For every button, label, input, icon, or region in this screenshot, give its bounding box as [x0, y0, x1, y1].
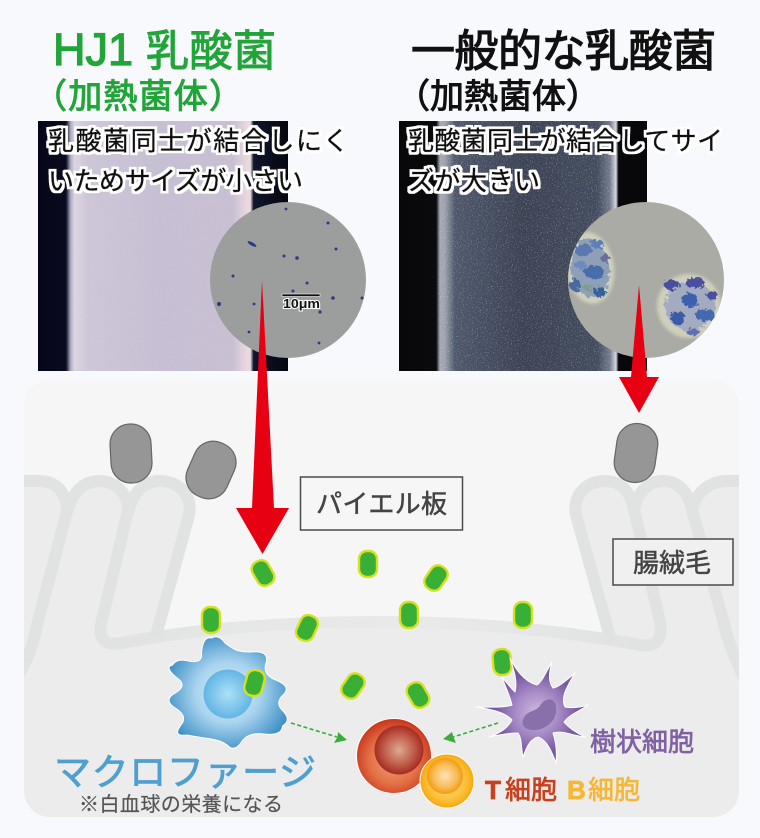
label: B cell: B [567, 775, 586, 805]
note: nutrition for white blood cells: ※白血球の栄養になる [79, 793, 283, 816]
label: Peyer's patch [300, 477, 462, 530]
caption: HJ1: いためサイズが小さい [48, 166, 303, 196]
arrow: red, general [619, 285, 659, 413]
arrow: dendritic cell to T cell [443, 723, 498, 743]
title: general lactic acid bacteria: 一般的な乳酸菌 [411, 27, 716, 76]
photo: HJ1 test tube [38, 121, 288, 371]
label: intestinal villi [613, 539, 733, 585]
micrograph: general clustered bacteria [561, 202, 724, 358]
tissue fill [24, 487, 739, 817]
panel: intestine illustration [24, 475, 739, 817]
icon: gray bacterium 2 [180, 435, 242, 505]
caption: general: ズが大きい [408, 166, 540, 196]
micrograph: HJ1 small dispersed bacteria [210, 202, 366, 358]
title: HJ1 lactic acid bacteria: HJ1 [53, 24, 133, 75]
label: Peyer's patch: パイエル板 [316, 489, 447, 519]
label: B cell: 細胞 [588, 775, 640, 805]
icon: gray bacterium 1 [109, 423, 153, 484]
villi and membrane outlines [0, 481, 760, 680]
icon: T cell [356, 718, 432, 794]
caption: HJ1 [48, 126, 349, 196]
caption: general: 乳酸菌同士が結合してサイ [408, 126, 723, 156]
label: dendritic cell: 樹状細胞 [590, 727, 694, 757]
label: T cell: 細胞 [505, 775, 557, 805]
caption: general [408, 126, 723, 196]
scale bar label: 10μm [283, 296, 320, 311]
title: HJ1 lactic acid bacteria: 乳酸菌 [146, 28, 276, 76]
subtitle: heat-killed, green: （加熱菌体） [33, 78, 243, 116]
label: macrophage: マクロファージ [54, 752, 316, 793]
icon: gray bacterium 3 [612, 421, 660, 485]
label: T cell: T [485, 775, 501, 805]
arrow: macrophage to T cell [291, 723, 347, 743]
icon: dendritic cell [476, 658, 588, 763]
title: HJ1 lactic acid bacteria [53, 24, 276, 76]
arrow: red, HJ1 [236, 280, 289, 554]
subtitle: heat-killed, black: （加熱菌体） [396, 78, 600, 116]
label: intestinal villi: 腸絨毛 [633, 548, 711, 578]
photo: general test tube [399, 121, 647, 371]
bacteria: green particles [202, 551, 532, 711]
icon: macrophage [169, 637, 287, 748]
caption: HJ1: 乳酸菌同士が結合しにく [48, 126, 349, 156]
icon: B cell [420, 754, 474, 808]
